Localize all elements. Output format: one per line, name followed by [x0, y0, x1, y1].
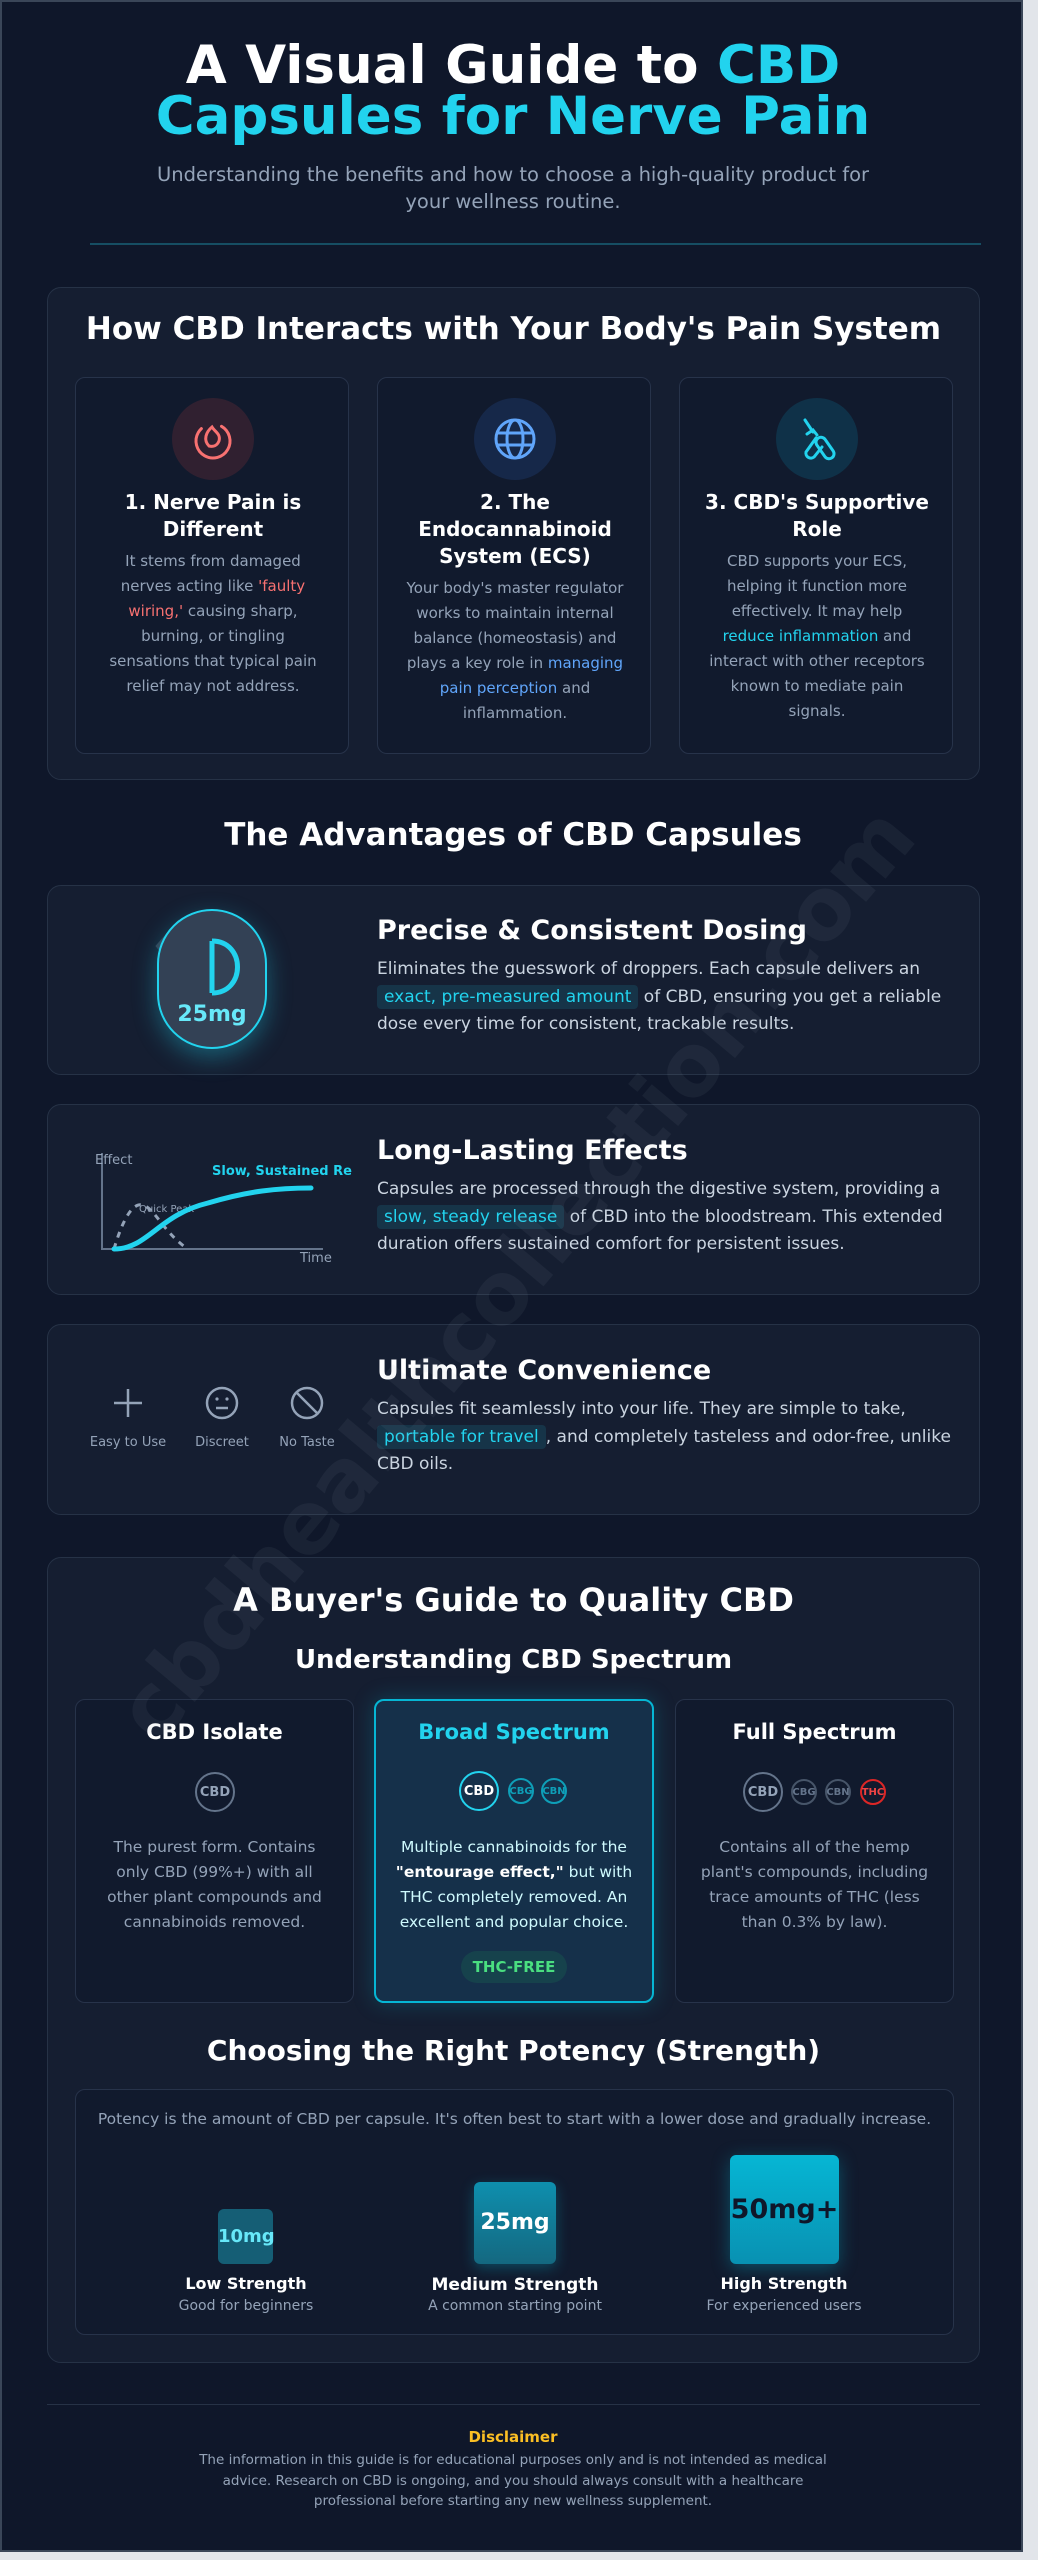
watermark: cbdhealthcollection.com: [97, 788, 935, 1760]
card: full spectrum: Contains all of the hemp plant's compounds, including trace amounts of THC (less than 0.3% by law).: [701, 1838, 928, 1931]
card: full spectrum: [675, 1699, 954, 2003]
card: broad spectrum: CBG: [509, 1786, 533, 1796]
potency: medium: Medium Strength: [432, 2275, 598, 2295]
potency: medium: [428, 2180, 602, 2314]
text: long-lasting: Capsules are processed through the digestive system, providing a slow, steady release of CBD into the bloodstream. This extended duration offers sustained comfort for persistent issues.: [377, 1179, 943, 1254]
card: nerve pain: It stems from damaged nerves acting like 'faulty wiring,' causing sharp, burning, or tingling sensations that typical pain relief may not address.: [109, 552, 317, 695]
potency: high: [706, 2150, 862, 2314]
potency: low: Good for beginners: [179, 2298, 313, 2314]
card: ECS: 2. The Endocannabinoid System (ECS): [418, 490, 612, 568]
text: precise dosing: Eliminates the guesswork of droppers. Each capsule delivers an exact, pre-measured amount of CBD, ensuring you get a reliable dose every time for consistent, trackable results.: [377, 959, 941, 1034]
card: full spectrum: CBN: [826, 1786, 850, 1798]
disclaimer: The information in this guide is for educational purposes only and is not intended as medical advice. Research on CBD is ongoing, and you should always consult with a healthcare professional before starting any new wellness supplement.: [199, 2452, 827, 2509]
icons: cannabinoids: CBD: [748, 1784, 778, 1800]
card: isolate: [75, 1699, 354, 2003]
text: convenience: Ultimate Convenience: [377, 1355, 711, 1386]
chart: release curve: Effect: [95, 1153, 132, 1168]
text: convenience: Capsules fit seamlessly into your life. They are simple to take, portable for travel , and completely tasteless and odor-free, unlike CBD oils.: [377, 1399, 951, 1474]
subtitle: Understanding the benefits and how to choose a high-quality product for your wellness routine.: [157, 163, 869, 213]
icon: capsule 25mg: [144, 906, 280, 1068]
panel: precise dosing: [47, 885, 980, 1075]
card: isolate: The purest form. Contains only CBD (99%+) with all other plant compounds and cannabinoids removed.: [107, 1838, 322, 1931]
icon: nerve: [172, 398, 254, 480]
potency: high: 50mg+: [731, 2194, 838, 2225]
card: supportive role: [679, 377, 953, 754]
potency: low: [179, 2209, 313, 2314]
card: ECS: [377, 377, 651, 754]
heading: how CBD interacts: How CBD Interacts with Your Body's Pain System: [86, 311, 941, 347]
panel: buyer's guide: [47, 1557, 980, 2363]
card: isolate: CBD Isolate: [146, 1720, 283, 1744]
title: Capsules for Nerve Pain: [156, 86, 870, 147]
potency: low: Low Strength: [185, 2274, 307, 2293]
icons: convenience: Easy to Use: [90, 1435, 166, 1450]
subheading: potency: Choosing the Right Potency (Strength): [207, 2034, 820, 2067]
card: broad spectrum: [374, 1699, 654, 2003]
disclaimer: Disclaimer: [468, 2428, 558, 2446]
chart: release curve: Quick Peak: [139, 1204, 194, 1215]
card: broad spectrum: Multiple cannabinoids for the "entourage effect," but with THC completely removed. An excellent and popular choice.: [396, 1838, 632, 1931]
card: ECS: Your body's master regulator works to maintain internal balance (homeostasis) and plays a key role in managing pain perception and inflammation.: [407, 579, 623, 722]
potency: medium: 25mg: [480, 2210, 550, 2235]
icon: capsule: [776, 398, 858, 480]
text: precise dosing: Precise & Consistent Dosing: [377, 915, 807, 946]
badge: THC-free: [461, 1951, 567, 1983]
potency box: [75, 2089, 954, 2335]
card: supportive role: 3. CBD's Supportive Role: [705, 490, 929, 541]
potency box: Potency is the amount of CBD per capsule. It's often best to start with a lower dose and gradually increase.: [98, 2110, 931, 2128]
text: long-lasting: [377, 1135, 943, 1254]
text: precise dosing: [377, 915, 941, 1034]
potency: high: For experienced users: [706, 2298, 862, 2314]
icons: convenience: [90, 1386, 335, 1450]
panel: convenience: [47, 1324, 980, 1515]
panel: long-lasting: [47, 1104, 980, 1295]
text: long-lasting: Long-Lasting Effects: [377, 1135, 688, 1166]
card: full spectrum: CBG: [792, 1786, 816, 1798]
icon: CBD: CBD: [200, 1784, 230, 1800]
heading: advantages: The Advantages of CBD Capsules: [224, 817, 802, 853]
icons: cannabinoids: [743, 1772, 783, 1812]
icons: cannabinoids: [459, 1771, 499, 1811]
title: A Visual Guide to CBD: [186, 35, 840, 96]
title: [156, 35, 870, 147]
card: full spectrum: THC: [862, 1786, 884, 1798]
heading: buyer's guide: A Buyer's Guide to Quality CBD: [233, 1581, 794, 1619]
subheading: spectrum: Understanding CBD Spectrum: [295, 1645, 732, 1675]
card: nerve pain: [75, 377, 349, 754]
text: convenience: [377, 1355, 951, 1474]
card: supportive role: CBD supports your ECS, helping it function more effectively. It may help reduce inflammation and interact with other receptors known to mediate pain signals.: [709, 552, 925, 720]
icons: cannabinoids: CBD: [464, 1784, 494, 1798]
icons: convenience: No Taste: [279, 1435, 335, 1450]
icon: CBD: [195, 1772, 235, 1812]
icon: capsule 25mg: 25mg: [177, 1002, 247, 1027]
card: nerve pain: 1. Nerve Pain is Different: [125, 490, 301, 541]
chart: release curve: Slow, Sustained Re: [212, 1164, 352, 1179]
potency: medium: A common starting point: [428, 2298, 602, 2314]
icons: convenience: Discreet: [195, 1435, 249, 1450]
card: broad spectrum: CBN: [542, 1786, 566, 1796]
icon: globe: [474, 398, 556, 480]
potency: low: 10mg: [218, 2226, 275, 2247]
chart: release curve: [95, 1153, 352, 1265]
card: full spectrum: Full Spectrum: [732, 1720, 897, 1744]
card: broad spectrum: Broad Spectrum: [418, 1720, 610, 1744]
badge: THC-free: THC-FREE: [473, 1958, 555, 1976]
potency: high: High Strength: [720, 2274, 848, 2293]
panel: how CBD interacts: [47, 287, 980, 780]
